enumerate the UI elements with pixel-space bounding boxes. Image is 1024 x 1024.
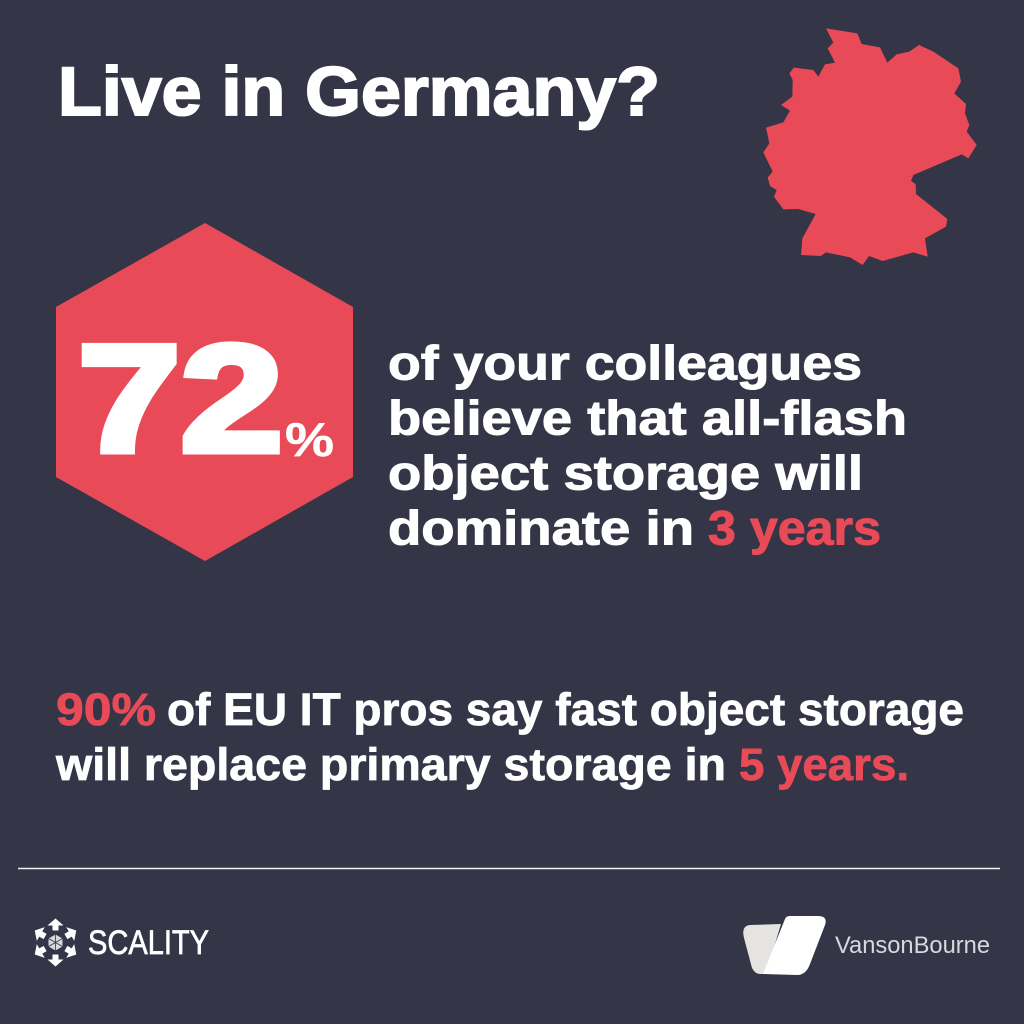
text block: EU IT pros statement: will replace primary storage in (55, 739, 726, 790)
stat badge: 72% hexagon (56, 223, 353, 561)
icon: map of Germany (763, 28, 977, 265)
text block: all-flash statement: of your colleagues (388, 338, 862, 390)
logo: VansonBourne: VansonBourne (835, 932, 990, 959)
text block: EU IT pros statement: 90% (56, 684, 156, 735)
text block: EU IT pros statement: of EU IT pros say fast object storage (167, 684, 964, 735)
stat badge: 72% hexagon: % (285, 413, 334, 466)
stat badge: 72% hexagon: 72 (78, 314, 283, 484)
icon: Scality hexagon arrows (31, 918, 80, 966)
text block: all-flash statement: object storage will (388, 448, 863, 500)
logo: VansonBourne (743, 916, 990, 975)
logo: Scality: SCALITY (88, 924, 209, 962)
text block: all-flash statement: believe that all-flash (388, 392, 907, 446)
text block: EU IT pros statement: 5 years. (739, 739, 909, 790)
text block: all-flash statement: 3 years (708, 502, 881, 556)
logo: Scality (31, 918, 209, 966)
icon: VansonBourne folder mark (743, 916, 826, 975)
text block: all-flash statement (388, 338, 907, 556)
text block: EU IT pros statement (55, 684, 964, 790)
text block: all-flash statement: dominate in (388, 502, 694, 556)
title: Live in Germany? (58, 53, 660, 130)
